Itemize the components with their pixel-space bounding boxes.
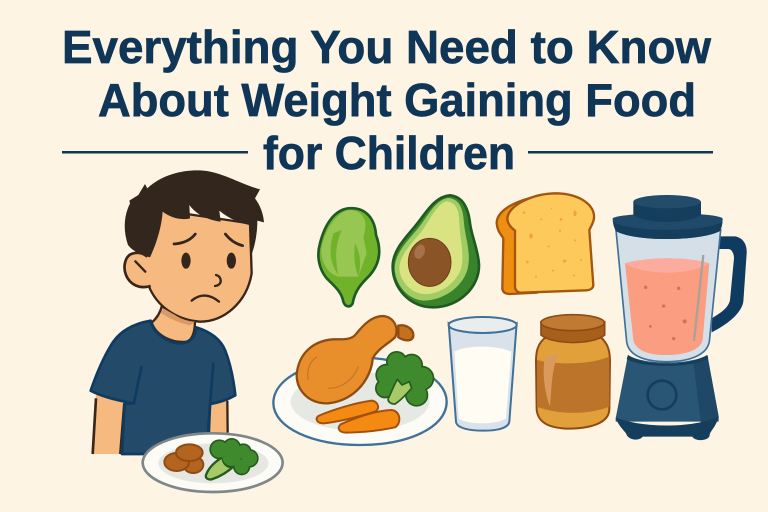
chicken plate xyxy=(273,316,447,445)
small plate xyxy=(143,433,283,492)
pit xyxy=(408,238,451,286)
carrots xyxy=(317,401,378,423)
hair xyxy=(125,170,264,257)
title xyxy=(62,21,713,179)
arms xyxy=(93,393,228,454)
title: for Children xyxy=(263,127,515,179)
eyebrows xyxy=(174,234,243,246)
broccoli xyxy=(206,438,259,479)
bread xyxy=(497,193,594,294)
illustration: sad boy xyxy=(91,170,264,454)
broccoli xyxy=(375,351,434,407)
base xyxy=(616,355,719,422)
spinach leaf xyxy=(318,208,379,306)
smoothie xyxy=(625,258,709,355)
blender xyxy=(613,195,747,440)
title: About Weight Gaining Food xyxy=(98,74,696,126)
eyes xyxy=(181,253,236,269)
milk glass xyxy=(449,317,517,431)
title: Everything You Need to Know xyxy=(62,21,711,73)
ear xyxy=(125,253,151,287)
meat xyxy=(164,444,203,473)
nose and mouth xyxy=(192,275,221,302)
chicken leg xyxy=(398,325,413,340)
jar xyxy=(616,230,721,362)
lid xyxy=(613,213,723,239)
face xyxy=(140,210,252,322)
t-shirt xyxy=(91,321,235,454)
neck xyxy=(152,307,195,342)
avocado xyxy=(393,195,479,307)
peanut butter jar xyxy=(536,315,610,429)
handle xyxy=(712,236,747,332)
